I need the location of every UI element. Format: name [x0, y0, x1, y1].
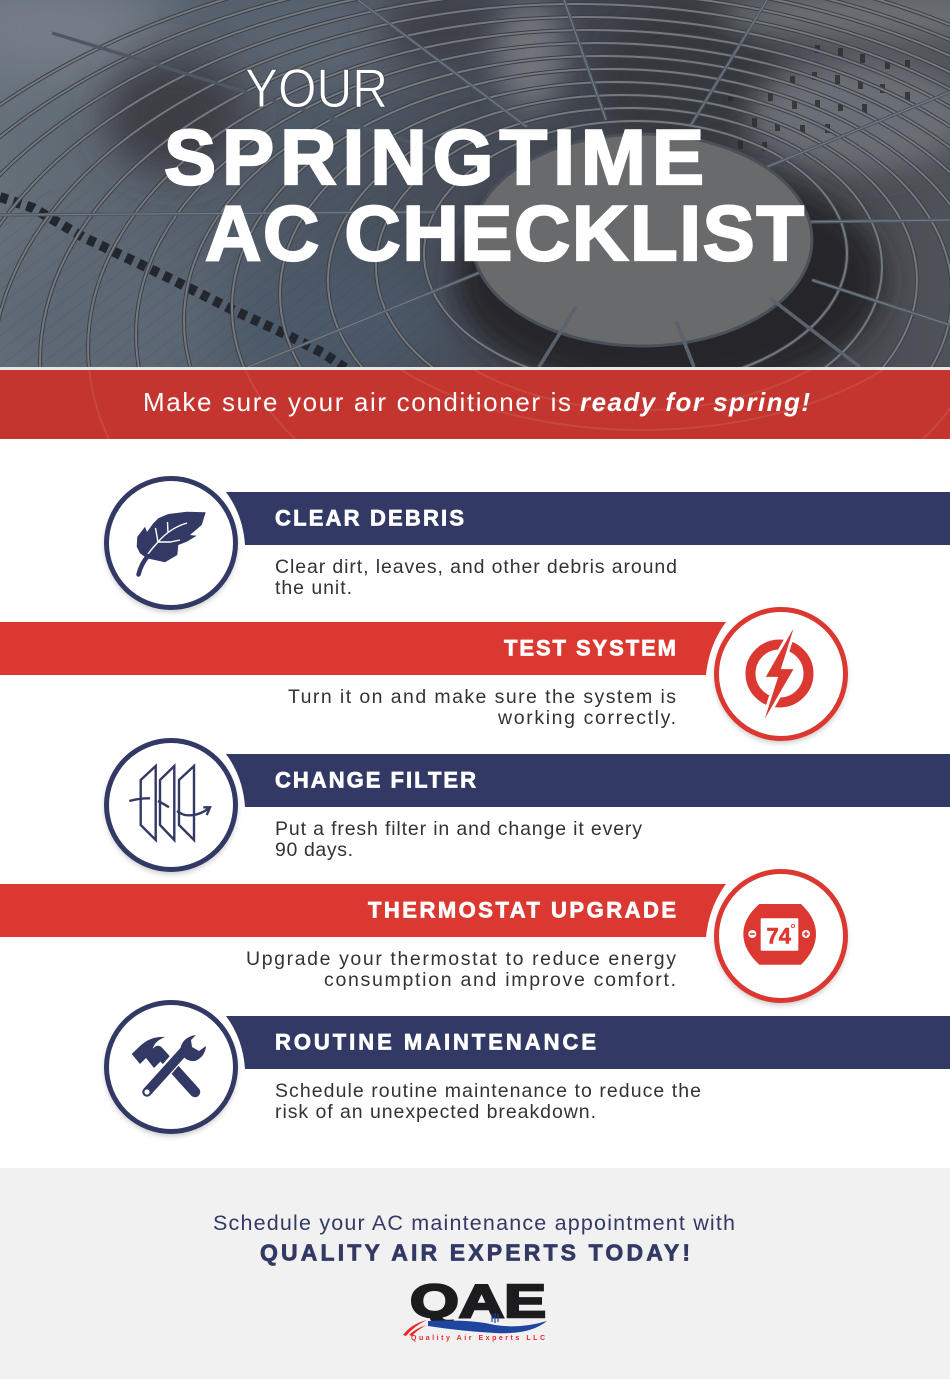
title line: AC CHECKLIST: AC CHECKLIST: [205, 189, 804, 277]
description: the unit.: [275, 577, 352, 599]
description: [275, 556, 677, 599]
subtitle band: [0, 367, 950, 439]
icon: thermostat in circle: 74: [766, 924, 792, 948]
description: working correctly.: [497, 707, 676, 729]
description: 90 days.: [275, 839, 353, 861]
description: risk of an unexpected breakdown.: [275, 1101, 596, 1123]
description: [246, 948, 676, 991]
icon: leaf in circle: [105, 478, 237, 612]
zigzag fins lower left: [0, 197, 345, 368]
title: [164, 57, 804, 277]
heading: CHANGE FILTER: [275, 768, 476, 792]
description: [275, 818, 642, 861]
item: clear debris: [105, 478, 950, 612]
icon: power bolt in circle: [715, 610, 847, 743]
title line: SPRINGTIME: SPRINGTIME: [164, 113, 704, 201]
fan hub: [472, 134, 812, 346]
fine fins lower left: [0, 190, 430, 368]
logo: QAE: [410, 1275, 546, 1327]
subtitle emphasis: ready for spring!: [580, 387, 810, 417]
footer line 1: Schedule your AC maintenance appointment with: [213, 1211, 735, 1235]
description: Turn it on and make sure the system is: [288, 686, 676, 708]
description: Schedule routine maintenance to reduce the: [275, 1080, 701, 1102]
spokes: [0, 0, 950, 367]
item: routine maintenance: [105, 1002, 950, 1136]
heading bar: [226, 754, 950, 807]
heading: ROUTINE MAINTENANCE: [275, 1030, 596, 1054]
item: test system: [0, 610, 847, 743]
description: [288, 686, 676, 729]
item: thermostat upgrade: [0, 872, 847, 1005]
hero photo: AC fan grille: [0, 0, 950, 367]
item: change filter: [105, 740, 950, 874]
grille fin squares top right: [728, 45, 910, 151]
description: Clear dirt, leaves, and other debris around: [275, 556, 677, 578]
icon: hammer and wrench in circle: [105, 1002, 237, 1136]
description: Upgrade your thermostat to reduce energy: [246, 948, 676, 970]
title line: YOUR: YOUR: [245, 57, 388, 119]
footer line 2: QUALITY AIR EXPERTS TODAY!: [260, 1240, 690, 1266]
description: [275, 1080, 701, 1123]
logo: [403, 1275, 547, 1342]
footer panel: [0, 1168, 950, 1379]
heading: TEST SYSTEM: [504, 636, 676, 660]
heading bar: [0, 884, 726, 937]
logo: Quality Air Experts LLC: [411, 1335, 545, 1342]
heading bar: [0, 622, 726, 675]
heading: THERMOSTAT UPGRADE: [368, 898, 676, 922]
description: Put a fresh filter in and change it every: [275, 818, 642, 840]
description: consumption and improve comfort.: [324, 969, 676, 991]
icon: thermostat in circle: [715, 872, 847, 1005]
heading: CLEAR DEBRIS: [275, 506, 464, 530]
heading bar: [226, 1016, 950, 1069]
subtitle text: Make sure your air conditioner is: [143, 387, 571, 417]
icon: air filter in circle: [105, 740, 237, 874]
heading bar: [226, 492, 950, 545]
